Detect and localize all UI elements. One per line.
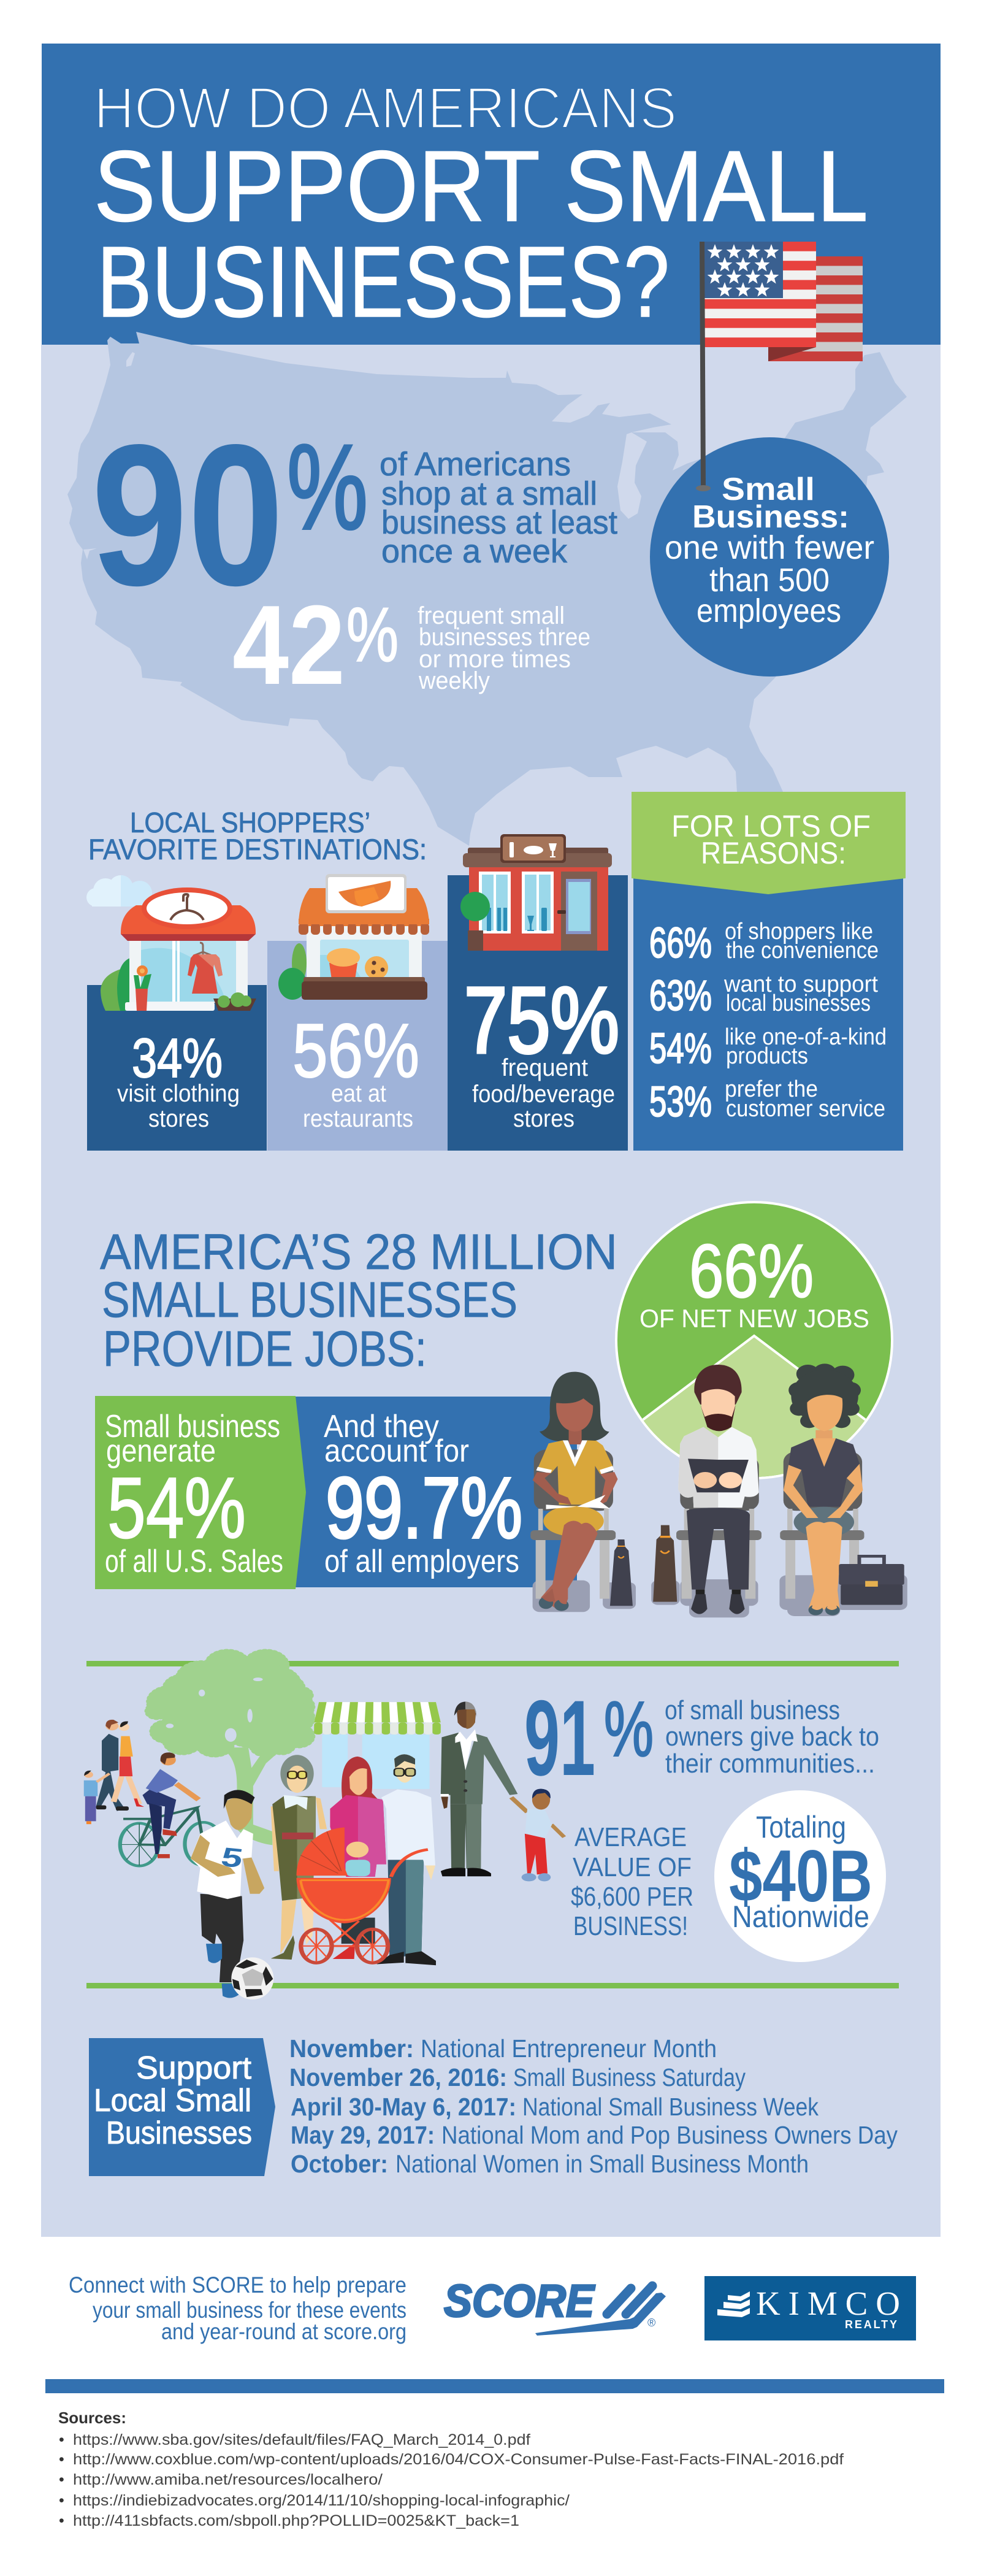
text: owners give back: owners give back to — [665, 1722, 879, 1752]
reason: convenience — [649, 919, 879, 967]
text: average value: $6,600 PER — [571, 1882, 693, 1912]
map: United States silhouette — [67, 332, 907, 846]
text: sources: Sources: — [58, 2409, 126, 2427]
heading: local shoppers favorite destinations: FAVORITE DESTINATIONS: — [88, 833, 427, 865]
figure: young boy holding hand — [511, 1788, 564, 1881]
figure: boy in soccer shirt — [191, 1790, 273, 1999]
title: SUPPORT SMALL — [94, 130, 868, 242]
pie: 66 percent of net new jobs: OF NET NEW JOBS — [639, 1304, 869, 1333]
figure: baby stroller — [296, 1827, 428, 1963]
storefront with awning — [314, 1702, 441, 1789]
figure: couple with child — [84, 1720, 144, 1824]
text: owners give back: their communities... — [665, 1749, 875, 1779]
panel: support local small businesses: Support — [136, 2050, 252, 2086]
stat: 34 percent visit clothing stores — [117, 1028, 240, 1132]
stat: 56 percent eat at restaurants: 56% — [292, 1009, 419, 1094]
figure: bearded man reading — [676, 1365, 762, 1614]
logo: SCORE: SCORE — [444, 2275, 595, 2326]
reason: one-of-a-kind products — [649, 1024, 887, 1072]
stat: 75 percent frequent food and beverage stores: frequent — [502, 1054, 588, 1081]
reason: convenience: the convenience — [726, 938, 879, 964]
list: events calendar: October: — [291, 2150, 388, 2178]
reason: customer service: customer service — [726, 1096, 885, 1122]
logo: Kimco Realty — [704, 2276, 916, 2340]
text: sources: https://www.sba.gov/sites/default/files/FAQ_March_2014_0.pdf — [73, 2431, 530, 2448]
text: of Americans shop at a small business: shop at a small — [381, 475, 597, 512]
text: of Americans shop at a small business: once a week — [381, 533, 568, 570]
heading: 28 million small businesses provide jobs: SMALL BUSINESSES — [102, 1272, 517, 1328]
logo: Kimco Realty: REALTY — [845, 2318, 897, 2331]
bar: clothing stores — [87, 985, 267, 1151]
icon: flag pole — [696, 242, 711, 491]
panel: 54 percent of all sales: 54% — [107, 1459, 246, 1556]
callout: small business definition — [650, 437, 889, 677]
text: sources — [58, 2409, 844, 2529]
text: of Americans shop at a small business: of Americans — [380, 446, 571, 483]
panel: support local small businesses: Businesses — [106, 2115, 252, 2151]
icon: American flag — [704, 242, 863, 361]
list: events calendar: National Small Business Week — [522, 2093, 819, 2121]
reason: customer service: 53% — [649, 1078, 712, 1125]
callout: small business definition: than 500 — [709, 562, 830, 599]
list: events calendar — [289, 2034, 898, 2178]
text: sources: http://www.coxblue.com/wp-content/uploads/2016/04/COX-Consumer-Pulse-Fast-Facts-FINAL-2016.pdf — [73, 2451, 844, 2468]
panel: 99.7 percent of employers — [296, 1397, 577, 1587]
callout: totaling 40B nationwide: Totaling — [756, 1810, 846, 1844]
text: connect with SCORE — [69, 2272, 407, 2344]
text: connect with SCORE: and year-round at score.org — [161, 2319, 407, 2344]
reason: customer service: prefer the — [725, 1076, 818, 1102]
stat: 34 percent visit clothing stores: visit clothing — [117, 1080, 240, 1107]
stat: 42 percent: % — [346, 592, 399, 678]
text: sources: http://www.amiba.net/resources/localhero/ — [73, 2471, 383, 2488]
stat: 56 percent eat at restaurants — [292, 1009, 419, 1132]
figure: handbag and umbrella — [610, 1525, 677, 1606]
list: events calendar: November 26, 2016: — [289, 2063, 507, 2091]
reason: support local: 63% — [649, 972, 712, 1019]
text: sources: • — [59, 2431, 64, 2448]
text: of Americans shop at a small business — [380, 446, 617, 570]
callout: small business definition: Small — [722, 472, 815, 507]
text: average value: VALUE OF — [573, 1852, 692, 1882]
banner: for lots of reasons: REASONS: — [701, 836, 846, 870]
stat: 56 percent eat at restaurants: eat at — [331, 1080, 386, 1107]
reason: one-of-a-kind products: products — [726, 1043, 808, 1069]
panel: header band — [42, 44, 941, 345]
callout: totaling 40B nationwide — [714, 1790, 886, 1962]
reason: support local: local businesses — [726, 991, 871, 1016]
reason: one-of-a-kind products: 54% — [649, 1024, 712, 1072]
stat: 75 percent frequent food and beverage stores: 75% — [464, 968, 619, 1073]
reason: convenience: 66% — [649, 919, 712, 967]
text: connect with SCORE: Connect with SCORE to help prepare — [69, 2272, 407, 2298]
text: frequent small businesses: businesses three — [419, 624, 590, 651]
text: owners give back — [665, 1695, 879, 1779]
list: events calendar: May 29, 2017: — [291, 2121, 435, 2149]
stat: 91 percent: 91 — [524, 1679, 595, 1798]
stat: 34 percent visit clothing stores: 34% — [132, 1028, 223, 1089]
stat: 90 percent: 90 — [91, 402, 284, 627]
text: of Americans shop at a small business: business at least — [381, 504, 617, 541]
illustration: community scene — [84, 1650, 564, 1999]
text: sources: • — [59, 2512, 64, 2529]
text: sources: • — [59, 2451, 64, 2468]
list: events calendar: National Mom and Pop Business Owners Day — [441, 2121, 898, 2149]
icon: food and beverage store — [460, 834, 612, 951]
panel: support local small businesses — [89, 2038, 275, 2176]
logo: SCORE — [444, 2275, 666, 2336]
panel: 54 percent of all sales: Small business — [105, 1409, 280, 1444]
pie: 66 percent of net new jobs — [616, 1202, 892, 1484]
text: frequent small businesses: or more times — [419, 646, 571, 673]
icon: clothing store — [86, 875, 256, 1011]
banner: for lots of reasons — [632, 792, 906, 894]
reason: convenience: of shoppers like — [725, 919, 873, 945]
callout: small business definition: Business: — [692, 499, 849, 535]
text: average value — [571, 1822, 693, 1941]
stat: 90 percent: % — [287, 420, 368, 554]
illustration: three seated workers — [530, 1363, 907, 1617]
logo: SCORE: ® — [647, 2317, 655, 2329]
stat: 75 percent frequent food and beverage stores — [464, 968, 619, 1132]
callout: totaling 40B nationwide: Nationwide — [732, 1899, 869, 1934]
text: frequent small businesses — [418, 602, 590, 694]
callout: totaling 40B nationwide: $40B — [729, 1835, 872, 1917]
bar: food and beverage stores — [448, 875, 628, 1151]
figure: black man in green suit — [440, 1701, 517, 1876]
text: frequent small businesses: frequent small — [418, 602, 565, 629]
text: average value: AVERAGE — [574, 1822, 687, 1852]
panel: 54 percent of all sales: generate — [106, 1433, 216, 1469]
title — [94, 75, 868, 338]
panel: light background — [41, 345, 941, 2237]
list: events calendar: November: — [289, 2034, 414, 2063]
decorative gaps in tree — [166, 1677, 263, 1742]
divider: green bottom line — [86, 1983, 899, 1988]
figure: tree — [147, 1650, 313, 1845]
figure: cyclist — [120, 1752, 222, 1866]
stat: 56 percent eat at restaurants: restaurants — [303, 1105, 413, 1132]
figure: woman with curly hair and briefcase — [780, 1363, 904, 1616]
reason: support local: want to support — [723, 972, 878, 997]
text: connect with SCORE: your small business for these events — [93, 2298, 407, 2323]
text: sources: • — [59, 2492, 64, 2509]
divider: blue footer bar — [45, 2379, 944, 2393]
logo: Kimco Realty: KIMCO — [756, 2285, 900, 2322]
panel: 99.7 percent of employers: 99.7% — [326, 1459, 522, 1556]
icon: restaurant — [278, 874, 429, 1000]
title: HOW DO AMERICANS — [94, 75, 677, 141]
bar: restaurants — [267, 941, 448, 1151]
figure: woman in yellow dress — [530, 1372, 618, 1611]
panel: 54 percent of all sales — [95, 1396, 306, 1589]
stat: 42 percent: 42 — [232, 581, 345, 708]
list: events calendar: April 30-May 6, 2017: — [291, 2093, 516, 2121]
figure: man with glasses — [376, 1754, 436, 1965]
heading: 28 million small businesses provide jobs — [100, 1224, 617, 1377]
text: sources: http://411sbfacts.com/sbpoll.php?POLLID=0025&KT_back=1 — [73, 2512, 519, 2529]
list: events calendar: National Entrepreneur Month — [421, 2034, 717, 2063]
panel: 99.7 percent of employers: And they — [324, 1409, 439, 1444]
panel: 54 percent of all sales: of all U.S. Sales — [105, 1544, 283, 1579]
figure: red-haired mother — [330, 1757, 386, 1959]
text: owners give back: of small business — [665, 1695, 840, 1725]
text: average value: BUSINESS! — [573, 1911, 688, 1941]
divider: green top line — [86, 1661, 899, 1666]
panel: 99.7 percent of employers: account for — [324, 1433, 469, 1469]
heading: local shoppers favorite destinations: LOCAL SHOPPERS’ — [130, 807, 370, 838]
reason: one-of-a-kind products: like one-of-a-kind — [725, 1024, 887, 1050]
heading: local shoppers favorite destinations — [88, 807, 427, 865]
heading: 28 million small businesses provide jobs: PROVIDE JOBS: — [103, 1321, 427, 1377]
text: sources: • — [59, 2471, 64, 2488]
title: BUSINESSES? — [97, 226, 670, 338]
panel: support local small businesses: Local Small — [94, 2083, 251, 2118]
stat: 75 percent frequent food and beverage stores: stores — [513, 1105, 574, 1132]
panel: 99.7 percent of employers: of all employers — [324, 1544, 519, 1579]
stat: 75 percent frequent food and beverage stores: food/beverage — [472, 1081, 615, 1108]
heading: 28 million small businesses provide jobs: AMERICA’S 28 MILLION — [100, 1224, 617, 1280]
stat: 91 percent: % — [604, 1685, 654, 1773]
callout: small business definition: employees — [697, 592, 841, 629]
callout: small business definition: one with fewer — [665, 529, 874, 566]
list: events calendar: Small Business Saturday — [513, 2063, 746, 2091]
figure: boy in soccer shirt: 5 — [219, 1842, 245, 1874]
reason: support local — [649, 972, 878, 1019]
banner: for lots of reasons: FOR LOTS OF — [671, 809, 871, 843]
text: sources: https://indiebizadvocates.org/2014/11/10/shopping-local-infographic/ — [73, 2492, 570, 2509]
list: events calendar: National Women in Small Business Month — [395, 2150, 809, 2178]
reason: customer service — [649, 1076, 885, 1125]
panel: reasons — [632, 792, 906, 1151]
figure: older woman in green dress — [271, 1755, 327, 1960]
stat: 34 percent visit clothing stores: stores — [148, 1105, 209, 1132]
pie: 66 percent of net new jobs: 66% — [689, 1230, 814, 1314]
text: frequent small businesses: weekly — [418, 667, 490, 694]
